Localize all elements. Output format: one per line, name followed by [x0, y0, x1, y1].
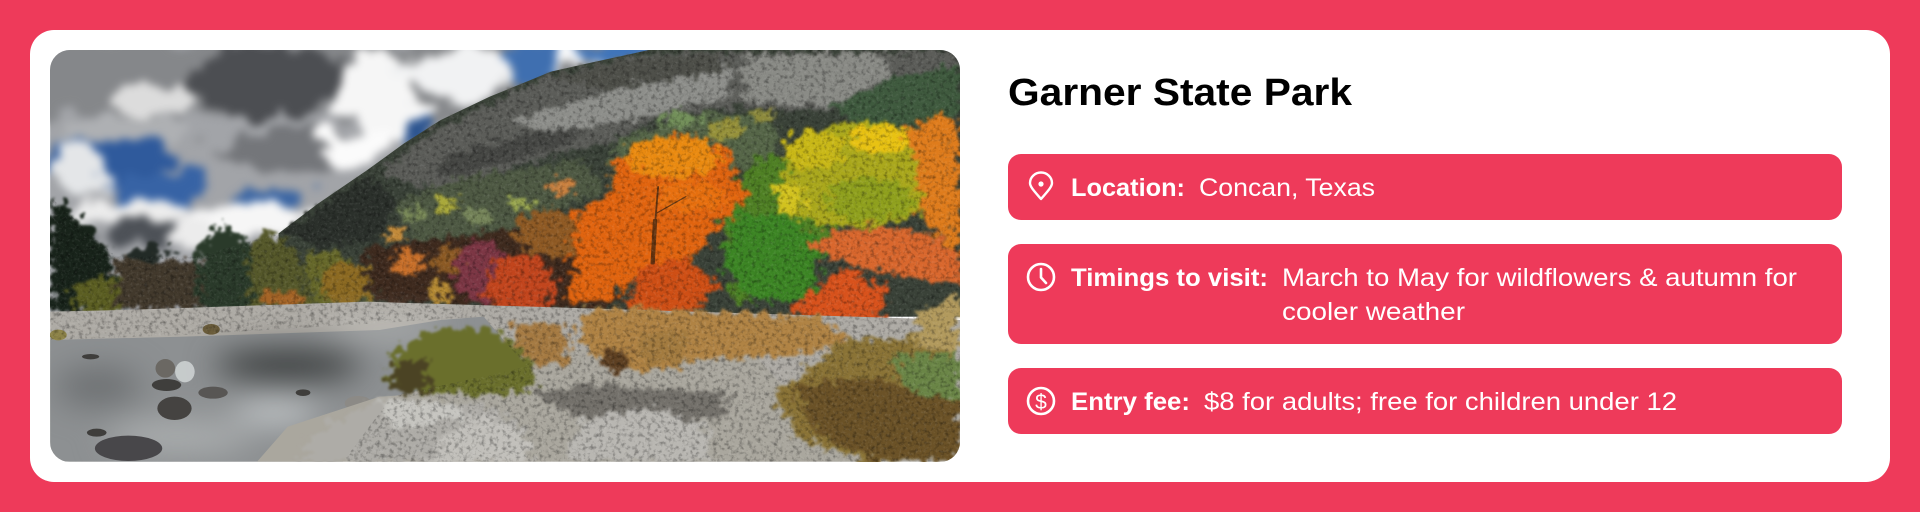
- label: timings: Timings to visit:: [1071, 264, 1268, 292]
- foliage and rock texture: [50, 50, 960, 462]
- label: location: Location:: [1071, 174, 1185, 202]
- value: timings: March to May for wildflowers & autumn for: [1282, 264, 1797, 292]
- foreground autumn trees: [560, 108, 960, 318]
- icon: dollar coin: [1028, 388, 1054, 414]
- icon: clock: [1028, 264, 1054, 290]
- info bar: timings: [1008, 244, 1842, 344]
- mountain cliff: [279, 50, 960, 317]
- icon: map pin: [1030, 172, 1052, 199]
- left tree line: [50, 197, 373, 313]
- distant autumn forest: [361, 210, 637, 317]
- value: entry fee: $8 for adults; free for children under 12: [1204, 388, 1677, 416]
- tree trunks: [653, 187, 686, 263]
- value: timings: cooler weather: [1282, 298, 1465, 326]
- icon: dollar coin: $: [1035, 391, 1047, 414]
- gravel bank and river: [50, 302, 960, 462]
- river stones: [50, 324, 372, 461]
- rocky foreground: [258, 378, 857, 462]
- info bar: entry fee: [1008, 368, 1842, 434]
- sky: [24, 40, 960, 317]
- label: entry fee: Entry fee:: [1071, 388, 1190, 416]
- photo: autumn trees along the river at Garner State Park: [24, 40, 960, 462]
- value: location: Concan, Texas: [1199, 174, 1375, 202]
- info bar: location: [1008, 154, 1842, 220]
- title: Garner State Park: [1008, 72, 1353, 114]
- tan and green grasses: [389, 293, 960, 462]
